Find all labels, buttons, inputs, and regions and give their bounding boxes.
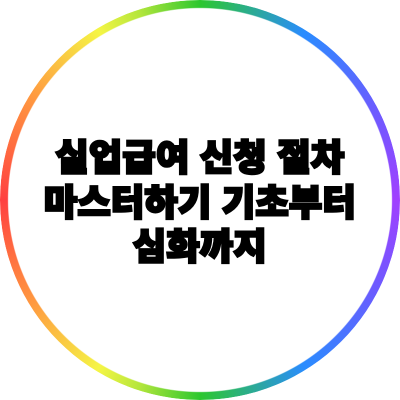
title: 마스터하기 기초부터 bbox=[44, 182, 356, 222]
title bbox=[44, 137, 356, 267]
title: 실업급여 신청 절차 bbox=[56, 137, 344, 178]
title: 심화까지 bbox=[133, 226, 267, 267]
